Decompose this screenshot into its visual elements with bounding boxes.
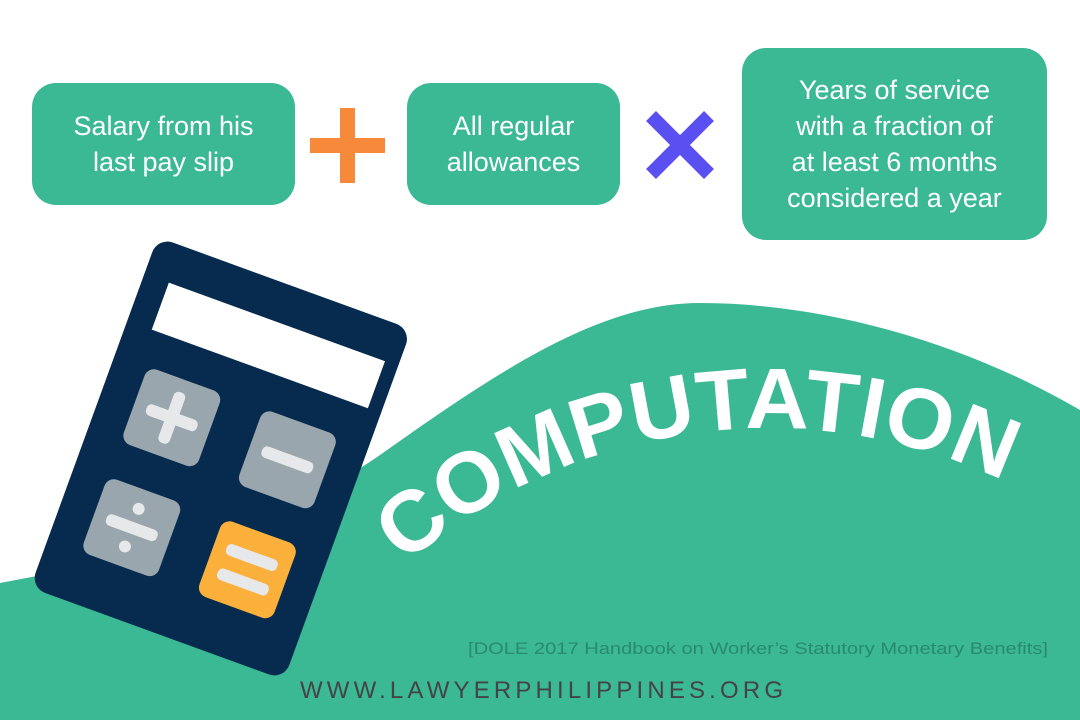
box: allowances: All regular [453, 111, 574, 141]
box: salary: last pay slip [93, 147, 234, 177]
icon: plus [310, 108, 385, 183]
box: years of service: Years of service [799, 75, 990, 105]
box: years of service [742, 48, 1047, 240]
box: salary [32, 83, 295, 205]
url: WWW.LAWYERPHILIPPINES.ORG [300, 677, 783, 704]
icon: multiply [646, 111, 714, 179]
box: allowances: allowances [447, 147, 580, 177]
box: years of service: considered a year [787, 183, 1002, 213]
box: salary: Salary from his [73, 111, 254, 141]
source text: [DOLE 2017 Handbook on Worker’s Statutory Monetary Benefits] [468, 639, 1048, 658]
title: curved COMPUTATION: COMPUTATION [380, 368, 1021, 552]
box: years of service: at least 6 months [792, 147, 997, 177]
box: allowances [407, 83, 620, 205]
box: years of service: with a fraction of [796, 111, 993, 141]
